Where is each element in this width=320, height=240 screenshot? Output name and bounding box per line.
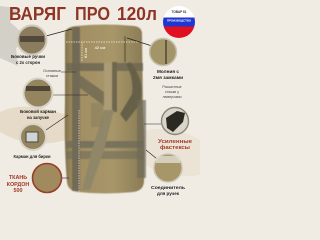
label: reinforced ties: Расшитные [162,85,182,89]
callout: fabric kordon 500: ТКАНЬ [9,175,27,181]
badge: russian flag [163,6,195,38]
callout: side handles: Боковые ручки [11,54,45,59]
callout: zipper [127,38,183,80]
label: reinforced ties [162,85,182,99]
callout: reinforced buckles [144,108,192,151]
label: main straps: стяжки [46,74,58,78]
dimension: height 81 cm [82,42,88,62]
dimension: width 42 cm: 42 см [95,45,105,50]
callout: handle connector: Соединитель [151,185,185,190]
dimension: height 81 cm: 81 см [84,48,88,58]
backpack [65,24,146,194]
callout: side pocket: на запучке [27,115,50,120]
callout: side handles [11,26,72,65]
badge: russian flag: ТОВАР 61 [172,10,187,14]
callout: side handles: с 2х сторон [16,60,40,65]
callout: fabric kordon 500: КОРДОН [7,182,29,188]
dimension: width 42 cm [66,42,142,50]
title [9,4,157,24]
callout: fabric kordon 500 [7,164,69,194]
callout: reinforced buckles: Усиленные [158,139,192,145]
label: reinforced ties: люверсами [163,95,181,99]
callout: side pocket: Боковой карман [20,109,56,114]
callout: reinforced buckles: фастексы [160,144,190,151]
callout: handle connector [146,150,185,196]
title: 120л [117,4,157,24]
label: reinforced ties: стяжки у [165,90,179,94]
callout: zipper: 2мя замками [153,75,183,80]
label: main straps: Основные [43,69,61,73]
callout: zipper: Молния с [157,69,179,74]
badge: russian flag: ПРОИЗВОДСТВО [167,18,192,22]
background camo [0,0,200,200]
title: ВАРЯГ [9,4,66,24]
title: ПРО [75,4,110,24]
callout: side pocket [20,78,88,120]
label: main straps [43,69,76,78]
callout: handle connector: для ручек [157,191,180,196]
callout: tag pocket [14,115,68,159]
callout: fabric kordon 500: 500 [14,188,22,194]
callout: tag pocket: Карман для бирки [14,154,51,159]
